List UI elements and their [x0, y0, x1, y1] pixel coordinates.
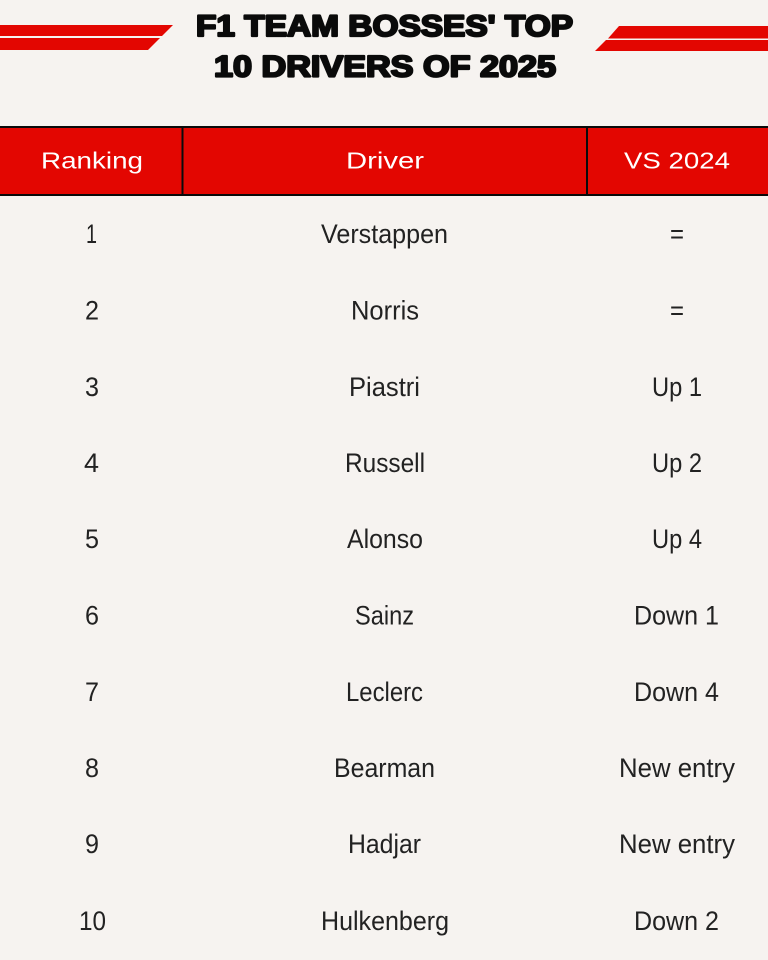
row 5: 5 — [85, 524, 99, 554]
title — [196, 10, 573, 84]
row 4: Russell — [345, 448, 425, 478]
row 3: 3 — [85, 372, 99, 402]
row 6: Down 1 — [634, 600, 719, 630]
row 10: Down 2 — [634, 906, 719, 936]
row 8: Bearman — [334, 753, 435, 783]
row 3: Up 1 — [652, 372, 702, 402]
row 7: Leclerc — [346, 677, 423, 707]
header: driver: Driver — [346, 148, 424, 174]
row 1: Verstappen — [321, 219, 448, 249]
row 2: = — [670, 296, 684, 326]
row 3: Piastri — [349, 372, 420, 402]
row 4 — [84, 448, 702, 478]
row 7 — [85, 677, 719, 707]
row 1 — [86, 219, 684, 249]
row 5 — [85, 524, 702, 554]
row 1: = — [670, 219, 684, 249]
table header — [0, 126, 768, 196]
row 4: 4 — [84, 448, 99, 478]
row 1: 1 — [86, 219, 97, 249]
decorative racing stripes: right — [595, 26, 768, 51]
row 2 — [85, 296, 684, 326]
row 4: Up 2 — [652, 448, 702, 478]
header: ranking: Ranking — [41, 148, 143, 174]
row 2: 2 — [85, 296, 99, 326]
decorative racing stripes: left — [0, 25, 173, 50]
row 9: Hadjar — [348, 829, 421, 859]
row 6: 6 — [85, 600, 99, 630]
title: 10 DRIVERS OF 2025 — [214, 50, 556, 84]
row 9 — [85, 829, 736, 859]
row 6 — [85, 600, 719, 630]
row 10: 10 — [79, 906, 106, 936]
row 10 — [79, 906, 719, 936]
title: F1 TEAM BOSSES' TOP — [196, 10, 573, 43]
row 8 — [85, 753, 736, 783]
row 7: 7 — [85, 677, 99, 707]
row 9: 9 — [85, 829, 99, 859]
row 8: 8 — [85, 753, 99, 783]
row 3 — [85, 372, 702, 402]
row 7: Down 4 — [634, 677, 719, 707]
row 2: Norris — [351, 296, 419, 326]
header: vs 2024: VS 2024 — [624, 148, 730, 174]
row 5: Up 4 — [652, 524, 702, 554]
row 8: New entry — [619, 753, 736, 783]
row 10: Hulkenberg — [321, 906, 449, 936]
row 5: Alonso — [347, 524, 423, 554]
row 6: Sainz — [355, 600, 414, 630]
row 9: New entry — [619, 829, 736, 859]
